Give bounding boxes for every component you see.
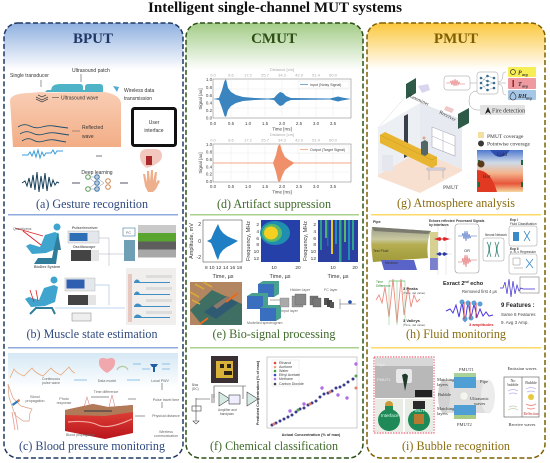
caption: chemical classification: (f) Chemical classification: [210, 438, 338, 453]
chart: echo reflections: Echoes reflected: [429, 219, 455, 223]
diagram: signal analysis flow: T: [518, 82, 522, 88]
chart: output target signal: 3.0: [313, 184, 320, 189]
chart: spectrogram 2: 10: [311, 249, 316, 255]
diagram: PMUT transducer on pipe: PMUT1: [459, 367, 474, 372]
diagram: CNN architecture: Modelled spectrogram: [247, 321, 283, 325]
diagram: signal analysis flow: avg: [526, 96, 532, 100]
chart: input noisy signal: 34.3: [278, 72, 287, 78]
diagram: muscle state estimation: Oscilloscope: [73, 245, 95, 249]
chart: output target signal: 2.5: [296, 184, 303, 189]
photos: PMUT device: [374, 357, 434, 433]
diagram: blood pressure monitoring: Wireless: [159, 430, 173, 434]
text: extract 2nd echo: Removed first 4 μs: [462, 289, 497, 294]
diagram: muscle state estimation: [13, 224, 176, 325]
diagram: PMUT transducer on pipe: [437, 367, 495, 427]
diagram: signal analysis flow: [444, 67, 536, 115]
icon: transmitter panel: [406, 78, 430, 108]
diagram: PMUT transducer on pipe: Pipe: [480, 379, 488, 384]
chart: output target signal: 25.7: [261, 138, 270, 142]
chart: output target signal: 1.5: [262, 184, 269, 189]
diagram: oscillator circuit: (DC): [192, 387, 199, 391]
text: extract 2nd echo: echo: [469, 281, 484, 287]
chart: output target signal: 0.2: [206, 172, 213, 176]
chart: predicted vs actual concentration: Ethyl Acetate: [279, 373, 300, 377]
text: nine features: [501, 303, 536, 325]
chart: spectrogram 2: 6: [313, 236, 316, 242]
chart: amplitude waveform: [189, 220, 242, 280]
chart: input noisy signal: 0.2: [206, 108, 213, 113]
chart: output target signal: 51.4: [312, 138, 321, 142]
chart: spectrogram 2: Frequency, MHz: [303, 221, 309, 261]
diagram: blood pressure monitoring: Blood propagation: [66, 433, 95, 437]
legend: coverage: PMUT coverage: [487, 134, 524, 140]
photo: circuit board: [190, 282, 242, 325]
chart: output target signal: 8.6: [228, 138, 235, 142]
chart: input noisy signal: 25.7: [261, 72, 270, 78]
diagram: blood pressure monitoring: [8, 353, 180, 439]
diagram: blood pressure monitoring: Time difference: [94, 390, 118, 394]
diagram: ultrasound patch on skin: transmission: [124, 96, 152, 102]
diagram: PMUT transducer on pipe: layers: [437, 411, 448, 416]
chart: output target signal: Distance [cm]: [270, 132, 294, 137]
chart: input noisy signal: 3.5: [330, 121, 337, 126]
chart: spectrogram 1: 8: [256, 242, 259, 248]
title: Intelligent single-channel MUT systems: [148, 0, 402, 16]
chart: spectrogram 1: 20: [295, 265, 301, 271]
diagram: processed signals and network: OR: [464, 248, 470, 253]
chart: output target signal: 0.8: [206, 150, 213, 154]
chart: input noisy signal: Input (Noisy Signal): [310, 83, 341, 87]
diagram: ultrasound patch on skin: Ultrasound wave: [61, 96, 98, 102]
caption: bio-signal processing: (e) Bio-signal processing: [212, 326, 336, 341]
chart: output target signal: Time [ms]: [272, 190, 292, 194]
diagram: blood pressure monitoring: propagation: [26, 399, 44, 403]
text: extract 2nd echo: [443, 280, 497, 294]
diagram: bubble vs no bubble waves: Reflection: [524, 412, 539, 416]
diagram: oscillator circuit: [192, 383, 260, 424]
diagram: processed signals and network: Neural Network: [485, 233, 507, 237]
diagram: CNN architecture: Hidden layer: [290, 288, 311, 292]
chart: output target signal: 0.6: [206, 157, 213, 162]
icon: tablet user interface: [132, 108, 176, 146]
photos: PMUT device: Pipe: [377, 362, 386, 367]
chart: input noisy signal: 51.4: [312, 72, 321, 78]
chart: input noisy signal: [198, 67, 351, 132]
diagram: muscle state estimation: PC: [126, 231, 131, 235]
chart: predicted vs actual concentration: Ethanol: [279, 361, 291, 365]
chart: spectrogram 1: Frequency, MHz: [246, 221, 252, 261]
diagram: CNN architecture: Input layer: [281, 309, 299, 313]
chart: input noisy signal: 1.0: [206, 77, 213, 82]
chart: output target signal: 1.0: [206, 142, 213, 147]
panel: BPUT: [4, 23, 183, 458]
text: nine features: Same 8 Features: [501, 312, 536, 317]
caption: gesture recognition: (a) Gesture recognition: [36, 196, 148, 211]
diagram: blood pressure monitoring: Photo: [59, 397, 69, 401]
chart: input noisy signal: 0.4: [206, 100, 213, 106]
chart: amplitude waveform: -2: [197, 255, 201, 261]
diagram: blood pressure monitoring: response: [57, 401, 71, 405]
caption: blood pressure monitoring: (c) Blood pressure monitoring: [19, 438, 165, 453]
chart: input noisy signal: 17.2: [244, 72, 253, 78]
chart: spectrogram 2: [303, 220, 358, 280]
heading: PMUT: PMUT: [434, 31, 478, 47]
diagram: processed signals and network: Fluid Classification: [510, 222, 537, 226]
chart: input noisy signal: Signal [au]: [198, 88, 203, 110]
chart: input noisy signal: 8.6: [228, 72, 235, 78]
heading: CMUT: CMUT: [251, 31, 297, 47]
chart: echo waveform with amplitudes: [446, 300, 494, 327]
photos: PMUT device: Interface: [381, 413, 399, 418]
diagram: signal analysis flow: RH: [517, 94, 527, 100]
chart: input noisy signal: 1.0: [245, 121, 252, 126]
chart: output target signal: 0.0: [210, 138, 217, 142]
panel: CMUT: [186, 23, 363, 458]
diagram: bubble vs no bubble waves: No: [511, 378, 515, 383]
diagram: oscillator circuit: Amplifier and: [218, 408, 237, 412]
caption: muscle state estimation: (b) Muscle state estimation: [26, 326, 158, 341]
chart: temperature heatmap: [477, 150, 523, 192]
chart: spectrogram 2: 20: [352, 265, 358, 271]
diagram: pipe with fluid: Test Fluid: [373, 249, 388, 253]
diagram: CNN architecture: [247, 281, 356, 325]
chart: output target signal: 60.0: [329, 138, 338, 142]
chart: output target signal: 0.5: [228, 184, 235, 189]
chart: spectrogram 1: 12: [254, 256, 259, 262]
diagram: blood pressure monitoring: Blood: [30, 395, 40, 399]
diagram: PMUT transducer on pipe: layers: [437, 382, 448, 387]
chart: output target signal: 17.2: [244, 138, 253, 142]
diagram: oscillator circuit: bandpass: [220, 412, 234, 416]
chart: peaks and valleys waveform: 3 Peaks: [403, 286, 419, 291]
icon: tablet user interface: interface: [144, 128, 164, 134]
chart: spectrogram 2: 12: [311, 256, 316, 262]
chart: output target signal: 0.0: [206, 179, 213, 184]
chart: amplitude waveform: Time, µs: [212, 274, 234, 280]
diagram: processed signals and network: Exp II: [510, 247, 519, 251]
chart: echo reflections: by interfaces: [429, 223, 449, 227]
chart: output target signal: 42.9: [295, 138, 304, 142]
diagram: ultrasound patch on skin: Wireless data: [124, 88, 155, 94]
chart: peaks and valleys waveform: (Time, del value): [403, 291, 425, 295]
illustration: smart room with PMUT beam: [378, 95, 467, 193]
diagram: blood pressure monitoring: Physical distance: [152, 414, 180, 418]
chart: predicted vs actual concentration: Predicted Concentration (% of max): [256, 360, 260, 425]
chart: amplitude waveform: Amplitude, mV: [189, 223, 195, 259]
chart: predicted vs actual concentration: Acetone: [279, 365, 292, 369]
heading: BPUT: BPUT: [73, 31, 113, 47]
chart: input noisy signal: 3.0: [313, 121, 320, 126]
diagram: blood pressure monitoring: Continuous: [42, 377, 60, 381]
text: extract 2nd echo: Exract 2: [443, 281, 464, 287]
legend: coverage: [478, 132, 530, 148]
chart: output target signal: 0.0: [210, 184, 217, 189]
chart: predicted vs actual concentration: Water: [279, 369, 289, 373]
icon: receiver panel: [438, 106, 469, 129]
diagram: signal analysis flow: avg: [522, 84, 528, 88]
text: nine features: 9. Avg 3 Amp.: [501, 320, 529, 325]
diagram: processed signals and network: Exp I: [510, 218, 518, 222]
chart: spectrogram 1: 6: [256, 236, 259, 242]
chart: output target signal: 3.5: [330, 184, 337, 189]
photos: PMUT device: PMUT1: [377, 377, 391, 382]
caption: bubble recognition: (i) Bubble recognition: [402, 438, 510, 453]
chart: peaks and valleys waveform: Difference: [376, 284, 391, 288]
chart: input noisy signal: 42.9: [295, 72, 304, 78]
label: PMUT: PMUT: [443, 185, 459, 191]
chart: output target signal: 2.0: [279, 184, 286, 189]
chart: spectrogram 2: 4: [313, 229, 316, 235]
text: nine features: 9 Features :: [501, 303, 535, 309]
chart: input noisy signal: 60.0: [329, 72, 338, 78]
chart: peaks and valleys waveform: [376, 279, 425, 327]
diagram: PMUT transducer on pipe: PMUT2: [457, 422, 472, 427]
chart: input noisy signal: 1.5: [262, 121, 269, 126]
chart: output target signal: 34.3: [278, 138, 287, 142]
diagram: ultrasound patch on skin: Reflected: [82, 125, 103, 131]
chart: input noisy signal: 0.0: [210, 72, 217, 78]
chart: input noisy signal: 0.0: [210, 121, 217, 126]
chart: echo reflections: [429, 219, 455, 275]
chart: spectrogram 2: 8: [313, 242, 316, 248]
caption: fluid monitoring: (h) Fluid monitoring: [406, 326, 506, 341]
chart: spectrogram 1: 10: [254, 249, 259, 255]
diagram: blood pressure monitoring: pulse wave: [42, 381, 60, 385]
diagram: PMUT transducer on pipe: Ultrasonic: [470, 396, 489, 401]
caption: artifact suppression: (d) Artifact suppression: [217, 196, 331, 211]
chart: predicted vs actual concentration: Actual Concentration (% of max): [282, 433, 341, 437]
chart: echo waveform with amplitudes: 3 amplitudes: [469, 322, 494, 327]
diagram: PMUT transducer on pipe: waves: [474, 401, 485, 406]
photo: chemical sensor chip: [211, 356, 238, 383]
chart: spectrogram 2: Time, µs: [328, 274, 349, 280]
diagram: ultrasound patch on skin: wave: [82, 134, 94, 140]
chart: predicted vs actual concentration: [256, 357, 358, 437]
diagram: ultrasound patch on skin: Single transducer: [10, 73, 49, 79]
diagram: signal analysis flow: P: [518, 70, 522, 76]
chart: amplitude waveform: 8 10 12 14 16 18: [205, 265, 242, 271]
chart: spectrogram 1: 4: [256, 229, 259, 235]
chart: peaks and valleys waveform: Time: [376, 280, 383, 284]
photos: PMUT device: PMUT1: [412, 408, 428, 413]
chart: output target signal: 0.4: [206, 164, 213, 170]
chart: amplitude waveform: 0: [198, 239, 201, 245]
diagram: pipe with fluid: Medium: [385, 261, 398, 265]
chart: spectrogram 1: Time, µs: [270, 274, 291, 280]
caption: atmosphere analysis: (g) Atmosphere analysis: [397, 195, 515, 210]
chart: predicted vs actual concentration: Carbon Dioxide: [279, 382, 304, 386]
chart: spectrogram 2: 2: [313, 222, 316, 228]
diagram: bubble vs no bubble waves: Receive waves: [509, 422, 536, 427]
diagram: muscle state estimation: BioDex System: [34, 265, 60, 269]
chart: input noisy signal: 0.6: [206, 93, 213, 98]
diagram: processed signals and network: [455, 218, 537, 274]
diagram: blood pressure monitoring: Data model: [98, 379, 116, 383]
diagram: blood pressure monitoring: Pulse travel time: [153, 398, 179, 402]
chart: predicted vs actual concentration: Methane: [279, 377, 293, 381]
diagram: bubble vs no bubble waves: Bubble: [525, 380, 537, 385]
diagram: blood pressure monitoring: Local PWV: [151, 379, 169, 383]
diagram: CNN architecture: FC layer: [324, 288, 338, 292]
diagram: ultrasound patch on skin: [10, 68, 155, 147]
chart: input noisy signal: Time [ms]: [272, 126, 292, 132]
chart: input noisy signal: Distance [cm]: [270, 67, 294, 72]
diagram: PMUT transducer on pipe: Matching: [437, 377, 455, 382]
diagram: oscillator circuit: Bias: [192, 383, 199, 387]
chart: temperature heatmap: Hot: [483, 175, 491, 180]
chart: temperature heatmap: Cold: [497, 153, 507, 158]
chart: output target signal: [198, 132, 351, 194]
icon: transmitter panel: Transmitter: [406, 93, 430, 108]
legend: coverage: Pointwise coverage: [487, 142, 530, 148]
diagram: muscle state estimation: Quadriceps: [13, 227, 32, 231]
diagram: signal analysis flow: avg: [522, 72, 528, 77]
diagram: PMUT transducer on pipe: Matching: [437, 406, 455, 411]
diagram: bubble vs no bubble waves: Emission waves: [507, 366, 537, 371]
chart: input noisy signal: 0.0: [206, 116, 213, 120]
chart: spectrogram 2: 10: [330, 265, 336, 271]
chart: input noisy signal: 0.8: [206, 85, 213, 90]
icon: receiver panel: Receiver: [438, 110, 456, 123]
diagram: gesture recognition pipeline: Deep learning: [81, 170, 113, 176]
chart: amplitude waveform: 2: [198, 222, 201, 228]
diagram: signal analysis flow: Fire detection: [492, 108, 525, 114]
chart: input noisy signal: 0.5: [228, 121, 235, 126]
diagram: ultrasound patch on skin: Ultrasound patch: [72, 68, 110, 74]
text: extract 2nd echo: nd: [464, 280, 469, 284]
diagram: processed signals and network: Processed Signals: [456, 219, 485, 223]
chart: input noisy signal: 2.5: [296, 121, 303, 126]
chart: peaks and valleys waveform: 3 Valleys: [403, 318, 421, 323]
chart: output target signal: Output (Target Signal): [310, 148, 345, 152]
chart: output target signal: Signal [au]: [198, 152, 203, 174]
icon: tablet user interface: User: [149, 120, 160, 126]
chart: spectrogram 1: 2: [256, 222, 259, 228]
chart: raw signal: [500, 277, 539, 297]
chart: output target signal: 1.0: [245, 184, 252, 189]
diagram: gesture recognition pipeline: [22, 149, 162, 192]
diagram: bubble vs no bubble waves: bubble: [508, 382, 519, 387]
chart: spectrogram 1: 10: [271, 265, 277, 271]
diagram: PMUT transducer on pipe: Bubble: [438, 392, 451, 397]
panel: PMUT: [367, 23, 545, 458]
chart: input noisy signal: 2.0: [279, 121, 286, 126]
diagram: bubble vs no bubble waves: [504, 366, 539, 427]
diagram: processed signals and network: ρ, B, c Regression: [510, 250, 536, 254]
chart: peaks and valleys waveform: (Time, del value): [403, 323, 425, 327]
diagram: pipe with fluid: Pipe: [373, 220, 381, 224]
diagram: pipe with fluid: [371, 220, 431, 270]
diagram: blood pressure monitoring: communication: [154, 434, 178, 438]
diagram: muscle state estimation: Pulser/receiver: [72, 226, 98, 230]
chart: spectrogram 1: [246, 220, 301, 280]
